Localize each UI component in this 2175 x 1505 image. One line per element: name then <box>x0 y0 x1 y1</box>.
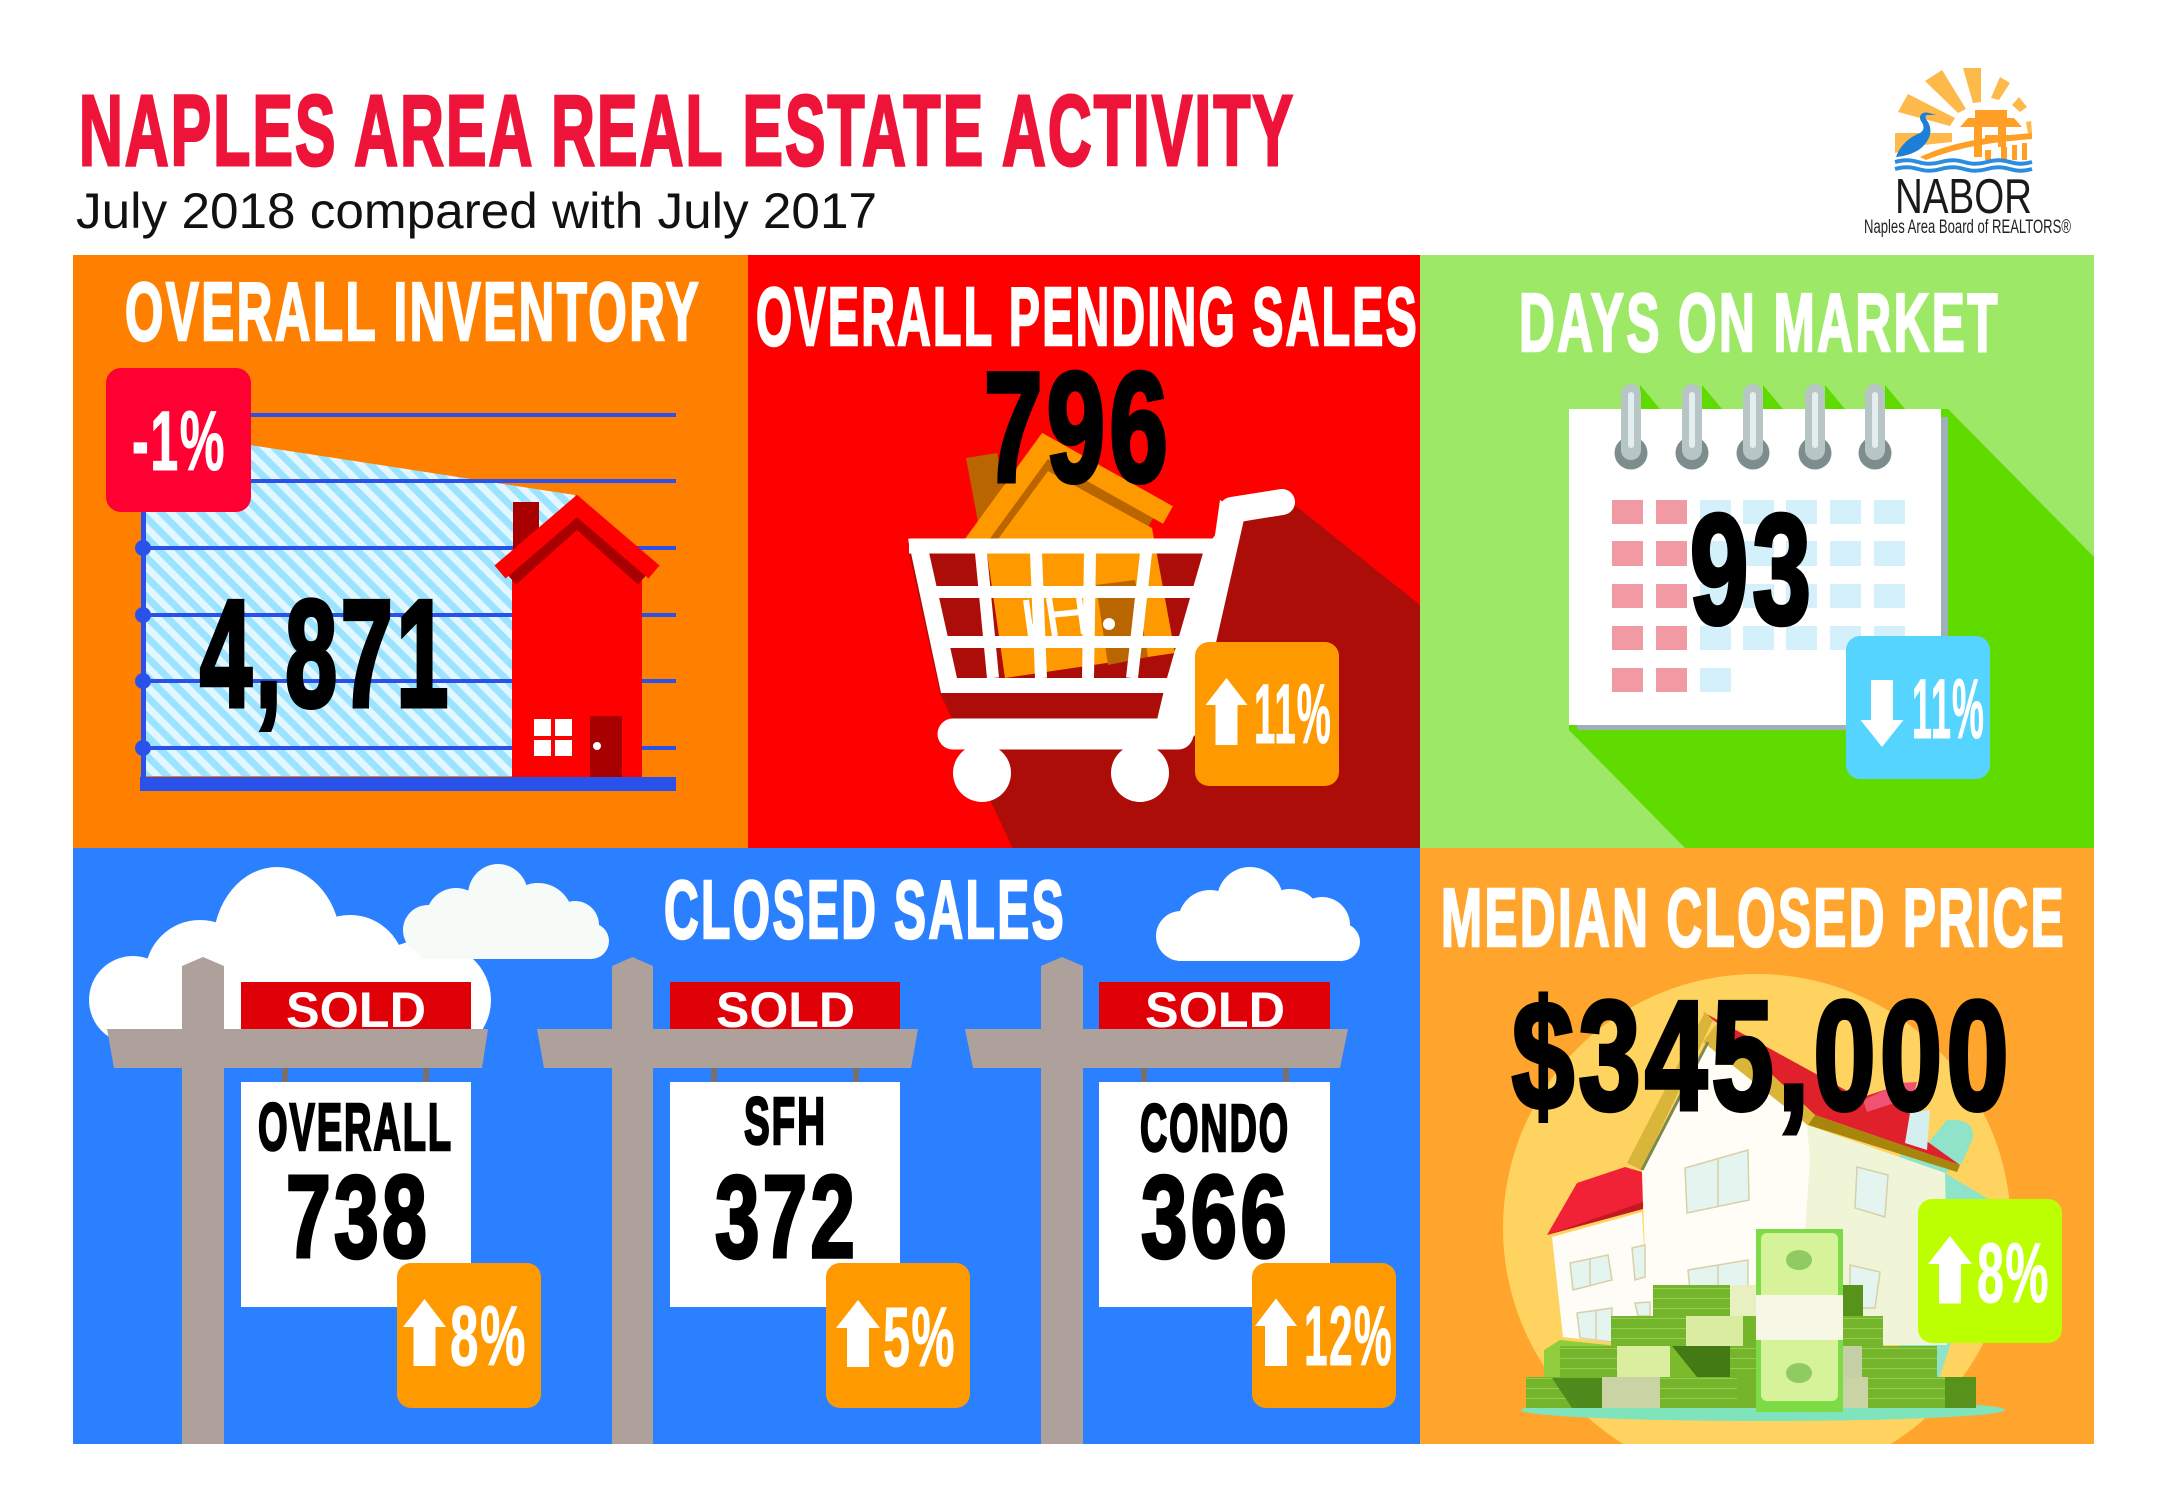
sign: overall: OVERALL <box>258 1090 453 1165</box>
windows <box>1570 1150 1888 1342</box>
sign: SFH: SFH <box>744 1084 827 1159</box>
cloud: middle <box>403 864 609 959</box>
badge: up 8% <box>1918 1199 2062 1343</box>
value: 4,871: 4,871 <box>200 569 452 739</box>
icon: shopping cart <box>908 500 1282 802</box>
badge: down 11% <box>1846 636 1990 779</box>
logo: NABOR: NABOR <box>1895 170 2032 224</box>
title: NAPLES AREA REAL ESTATE ACTIVITY <box>79 75 1295 187</box>
badge: -1%: -1% <box>132 394 226 488</box>
badge: up 11% <box>1195 642 1339 786</box>
badge: up 8%: 8% <box>450 1289 527 1383</box>
icon: house in cart <box>966 446 1175 678</box>
sign: SFH: SOLD <box>716 982 855 1038</box>
badge: up 12%: 12% <box>1304 1289 1393 1383</box>
sign: condo: SOLD <box>1145 982 1285 1038</box>
sign: SFH: 372 <box>715 1151 858 1282</box>
panel: days on market <box>1420 255 2094 849</box>
badge: up 8% <box>397 1263 541 1408</box>
cloud: left large <box>89 867 491 1036</box>
icon: calendar <box>1569 384 1948 730</box>
value: 796: 796 <box>984 341 1172 515</box>
sign: overall <box>107 957 541 1444</box>
panel: overall pending sales <box>748 255 1420 849</box>
heading: overall pending sales: OVERALL PENDING SALES <box>756 270 1419 363</box>
sign: overall: SOLD <box>286 982 426 1038</box>
cart shadow <box>908 495 1420 849</box>
panel: days on market: 11% <box>1912 662 1985 756</box>
badge: up 8%: 8% <box>1977 1226 2050 1320</box>
badge: up 12% <box>1252 1263 1396 1408</box>
value: 93: 93 <box>1690 483 1815 657</box>
heading: closed sales: CLOSED SALES <box>664 863 1066 956</box>
badge: -1% <box>106 368 251 512</box>
subtitle: July 2018 compared with July 2017 <box>76 183 877 239</box>
money stacks <box>1526 1229 1976 1412</box>
area chart with house <box>135 415 676 791</box>
logo: NABOR: Naples Area Board of REALTORS® <box>1864 217 2071 238</box>
left wing <box>1552 1212 1650 1347</box>
sign: condo: CONDO <box>1140 1091 1290 1166</box>
panel: overall inventory <box>73 255 748 849</box>
panel: median closed price <box>1420 848 2094 1482</box>
panel: overall pending sales: 11% <box>1254 667 1332 761</box>
calendar shadow <box>1569 409 2094 849</box>
badge: up 5%: 5% <box>883 1290 956 1384</box>
panel: closed sales <box>73 848 1420 1444</box>
sign: overall: 738 <box>286 1151 430 1282</box>
sign: SFH <box>537 957 970 1444</box>
sign: condo: 366 <box>1141 1151 1290 1282</box>
cloud: right <box>1156 867 1360 961</box>
main house body <box>1642 1046 1946 1316</box>
logo: NABOR <box>1864 68 2071 238</box>
icon: red house <box>500 502 654 777</box>
badge: up 5% <box>826 1263 970 1408</box>
sign: condo <box>965 957 1396 1444</box>
illustration: house and money <box>1503 974 2011 1482</box>
heading: overall inventory: OVERALL INVENTORY <box>125 265 701 358</box>
